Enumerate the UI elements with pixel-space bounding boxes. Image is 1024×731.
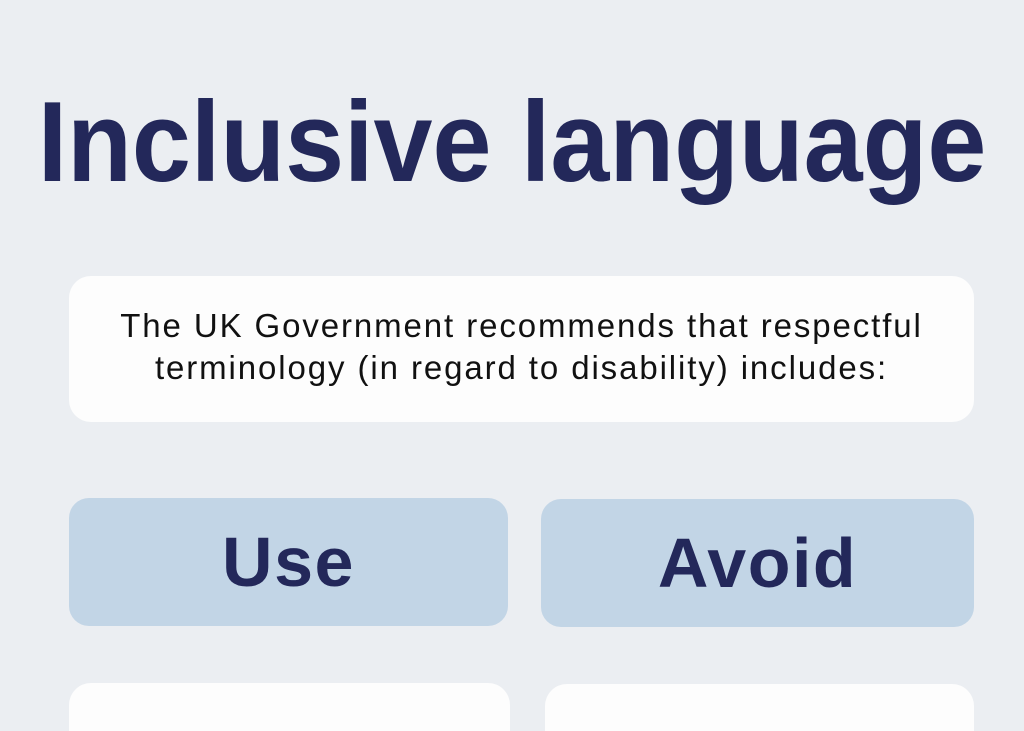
intro text: The UK Government recommends that respectful [120, 307, 923, 344]
panel: use terms [69, 683, 510, 731]
title: Inclusive language [38, 79, 986, 206]
intro text box [69, 276, 974, 422]
intro text [120, 307, 923, 386]
heading: Avoid: Avoid [658, 524, 857, 602]
panel: avoid terms [545, 684, 974, 731]
heading: Use: Use [222, 523, 355, 601]
intro text: terminology (in regard to disability) includes: [155, 349, 888, 386]
heading: Use [69, 498, 508, 626]
heading: Avoid [541, 499, 974, 627]
